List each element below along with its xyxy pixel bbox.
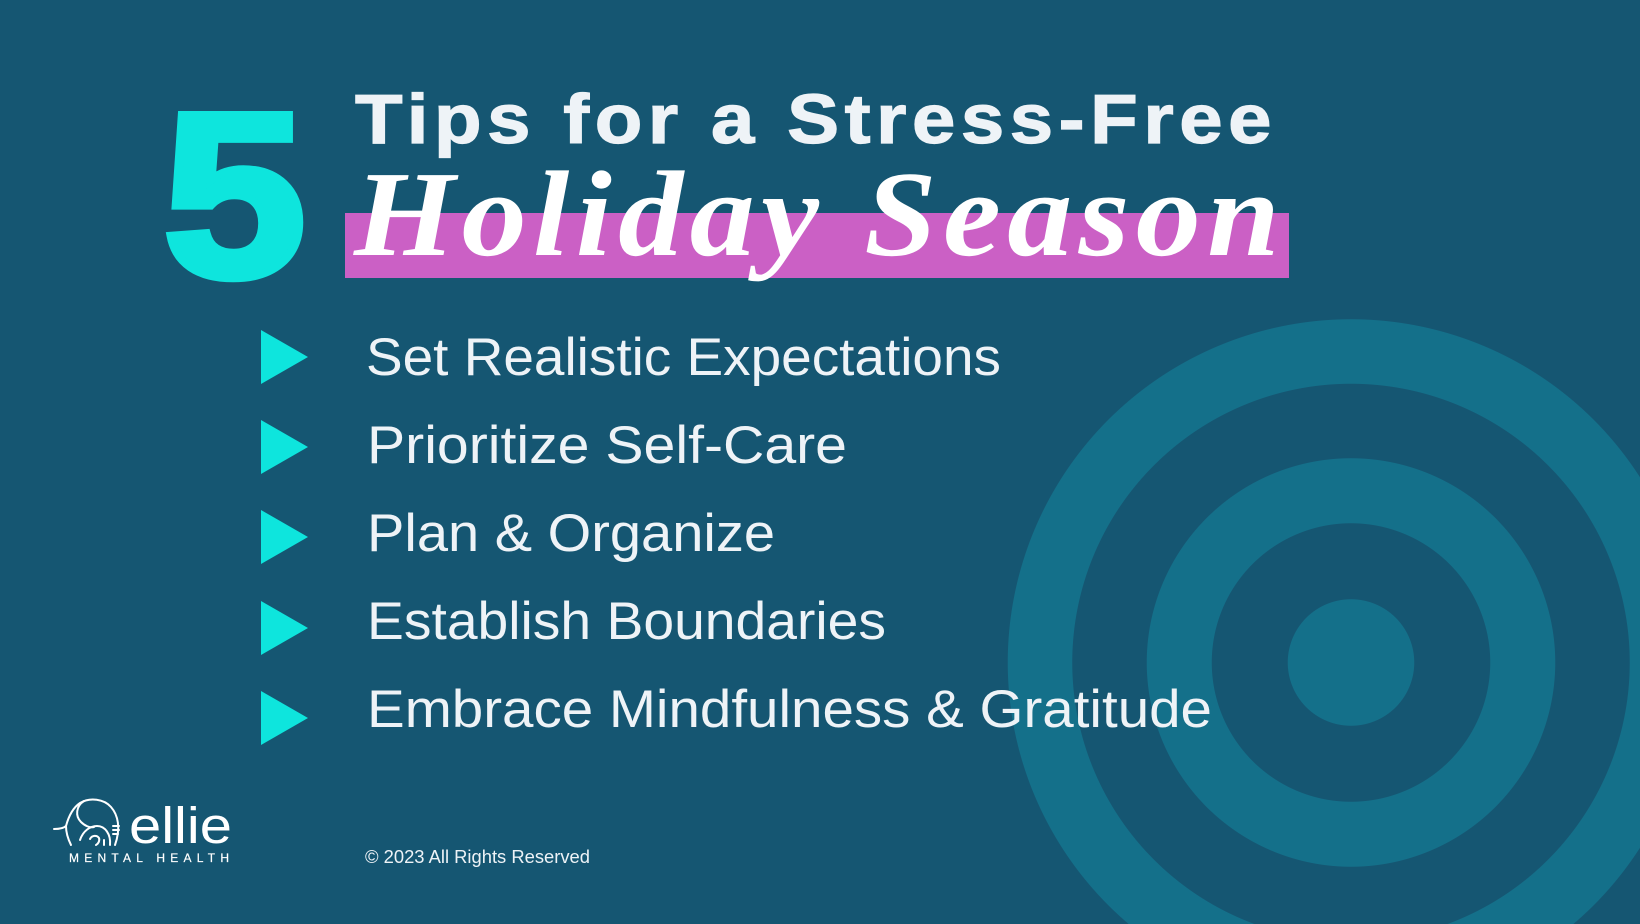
numeral 5: 5 (163, 64, 306, 326)
tip 4: Establish Boundaries (367, 592, 886, 651)
tip 2: Prioritize Self-Care (367, 416, 847, 475)
icon: elephant and calf (54, 800, 119, 845)
tip 5: Embrace Mindfulness & Gratitude (367, 680, 1212, 739)
tip 1: Set Realistic Expectations (366, 328, 1001, 387)
title: Tips for a Stress-Free: Tips for a Stress-Free (355, 80, 1277, 158)
title: Holiday Season: Holiday Season (353, 147, 1286, 282)
highlight bar (345, 213, 1289, 278)
tip 3: Plan & Organize (367, 504, 775, 563)
copyright: © 2023 All Rights Reserved (365, 847, 590, 867)
tip list (261, 328, 1212, 745)
wordmark: ellie (129, 797, 232, 854)
tagline: MENTAL HEALTH (69, 851, 229, 865)
logo: ellie mental health (54, 797, 232, 865)
